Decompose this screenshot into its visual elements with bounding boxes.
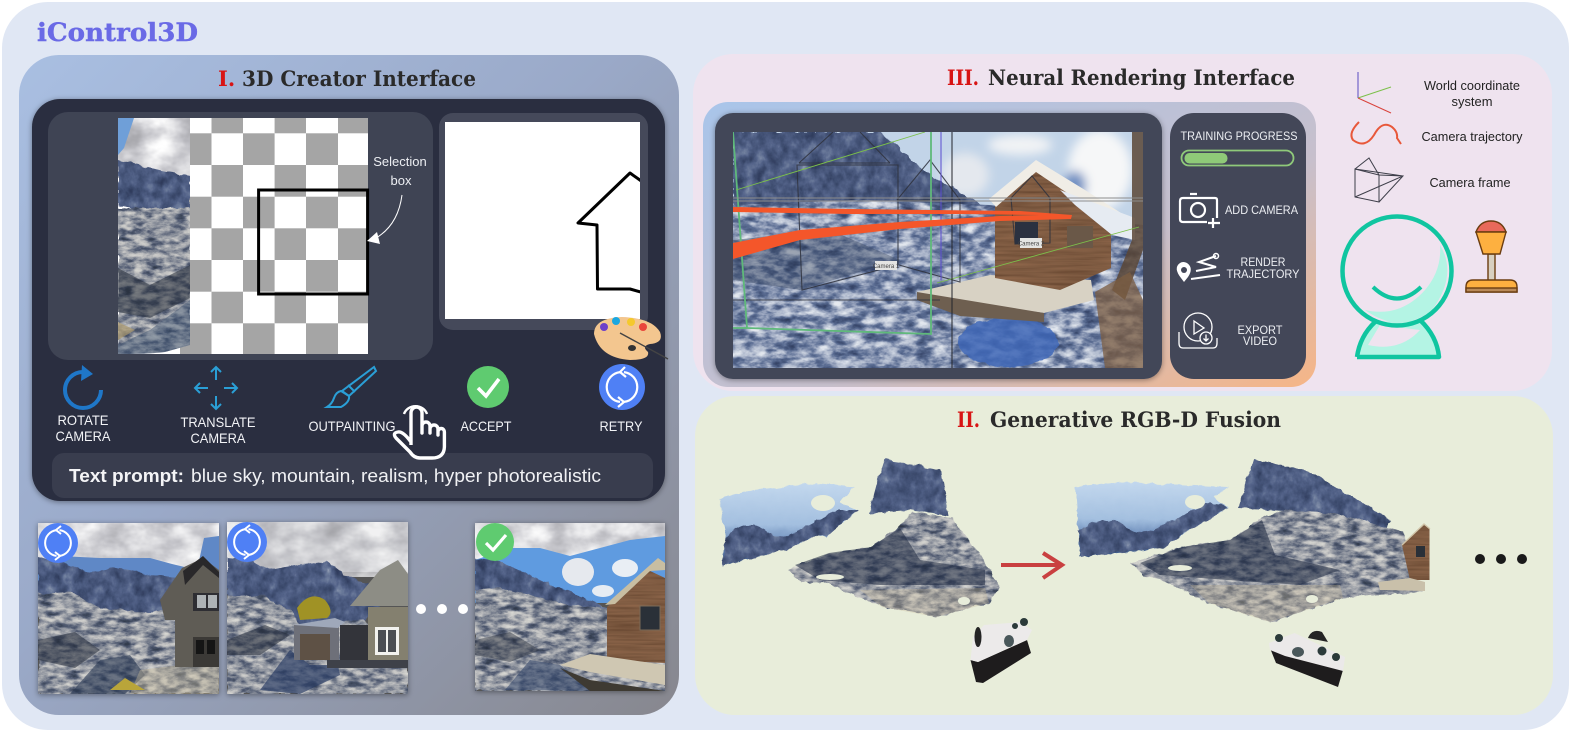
heading: 3D Creator Interface: I. (218, 66, 235, 91)
control: rotate camera: CAMERA (56, 428, 111, 444)
sketch panel (439, 113, 648, 330)
camera trajectory ribbon (733, 207, 1072, 259)
control: retry: RETRY (600, 418, 643, 434)
text prompt bar (52, 453, 653, 498)
control: retry (599, 364, 645, 434)
panel: Neural Rendering Interface (693, 54, 1552, 391)
point cloud after fusion (1075, 459, 1430, 622)
side control panel (1170, 113, 1306, 379)
control: outpainting: OUTPAINTING (308, 418, 396, 434)
partial scene photo (118, 118, 190, 358)
ellipsis dots (1475, 554, 1527, 564)
legend: camera frame: Camera frame (1430, 175, 1510, 190)
legend: world coordinate system: World coordinate (1424, 78, 1520, 93)
canvas panel with checkerboard (48, 112, 433, 360)
house sketch (578, 173, 644, 293)
heading: Generative RGB-D Fusion: Generative RGB-D Fusion (990, 407, 1281, 432)
control: accept: ACCEPT (460, 418, 512, 434)
training progress (1180, 129, 1298, 166)
icon: camera right (1269, 631, 1345, 687)
control: rotate camera: ROTATE (58, 412, 108, 428)
icon: palette (594, 317, 668, 360)
camera tag 2: Camera 2 (1018, 242, 1045, 248)
arrow (1001, 553, 1062, 578)
training progress: TRAINING PROGRESS (1180, 129, 1298, 143)
legend: camera trajectory (1351, 122, 1523, 144)
control: translate camera (180, 367, 256, 446)
legend: world coordinate system: system (1452, 94, 1492, 109)
icon: joystick (1466, 221, 1517, 292)
callout: selection box (367, 154, 427, 244)
add camera (1180, 194, 1298, 228)
panel: Generative RGB-D Fusion (695, 396, 1553, 715)
export video: VIDEO (1243, 334, 1277, 348)
legend: camera trajectory: Camera trajectory (1422, 129, 1523, 144)
panel: 3D Creator Interface (19, 55, 679, 715)
icon: retry badge (227, 522, 267, 562)
icon: robot user (1342, 216, 1452, 357)
cabin (1402, 525, 1430, 580)
legend: world coordinate system (1358, 72, 1520, 113)
heading: Neural Rendering Interface: Neural Rendering Interface (988, 65, 1295, 90)
heading: Generative RGB-D Fusion: II. (957, 407, 980, 432)
selection box (259, 190, 368, 294)
ellipsis dots (416, 604, 468, 614)
control: accept (460, 366, 512, 434)
camera frustums and axes (733, 132, 1143, 368)
render trajectory: TRAJECTORY (1226, 267, 1300, 281)
render trajectory: RENDER (1240, 255, 1286, 269)
control: rotate camera (56, 365, 111, 444)
cabin (917, 275, 1094, 313)
callout: selection box: box (391, 173, 412, 188)
point cloud before fusion (719, 459, 1000, 617)
icon: retry badge (38, 523, 78, 563)
export video (1179, 313, 1283, 348)
text prompt bar: Text prompt: (69, 466, 184, 486)
callout: selection box: Selection (373, 154, 427, 169)
heading: 3D Creator Interface: 3D Creator Interface (242, 66, 476, 91)
legend: camera frame (1355, 158, 1510, 202)
icon: accept badge (476, 523, 514, 561)
control: outpainting (308, 367, 396, 434)
camera tag 1 (873, 261, 900, 270)
export video: EXPORT (1238, 323, 1283, 337)
thumbnail: retry result 1 (38, 523, 219, 694)
add camera: ADD CAMERA (1225, 203, 1298, 217)
control: translate camera: CAMERA (190, 430, 246, 446)
camera tag 2 (1018, 238, 1045, 248)
text prompt bar: blue sky, mountain, realism, hyper photorealistic (191, 466, 601, 486)
render trajectory (1177, 254, 1300, 282)
icon: hand pointer (394, 406, 444, 458)
gradient card (703, 102, 1316, 387)
main title: iControl3D (37, 18, 198, 47)
control: translate camera: TRANSLATE (180, 414, 256, 430)
heading: Neural Rendering Interface: III. (947, 65, 979, 90)
rendered scene viewport (715, 113, 1162, 379)
icon: camera left (970, 618, 1032, 683)
camera tag 1: Camera 1 (873, 264, 900, 270)
thumbnail: accepted result (475, 523, 665, 691)
thumbnail: retry result 2 (227, 522, 408, 694)
dark interface card (32, 99, 668, 501)
